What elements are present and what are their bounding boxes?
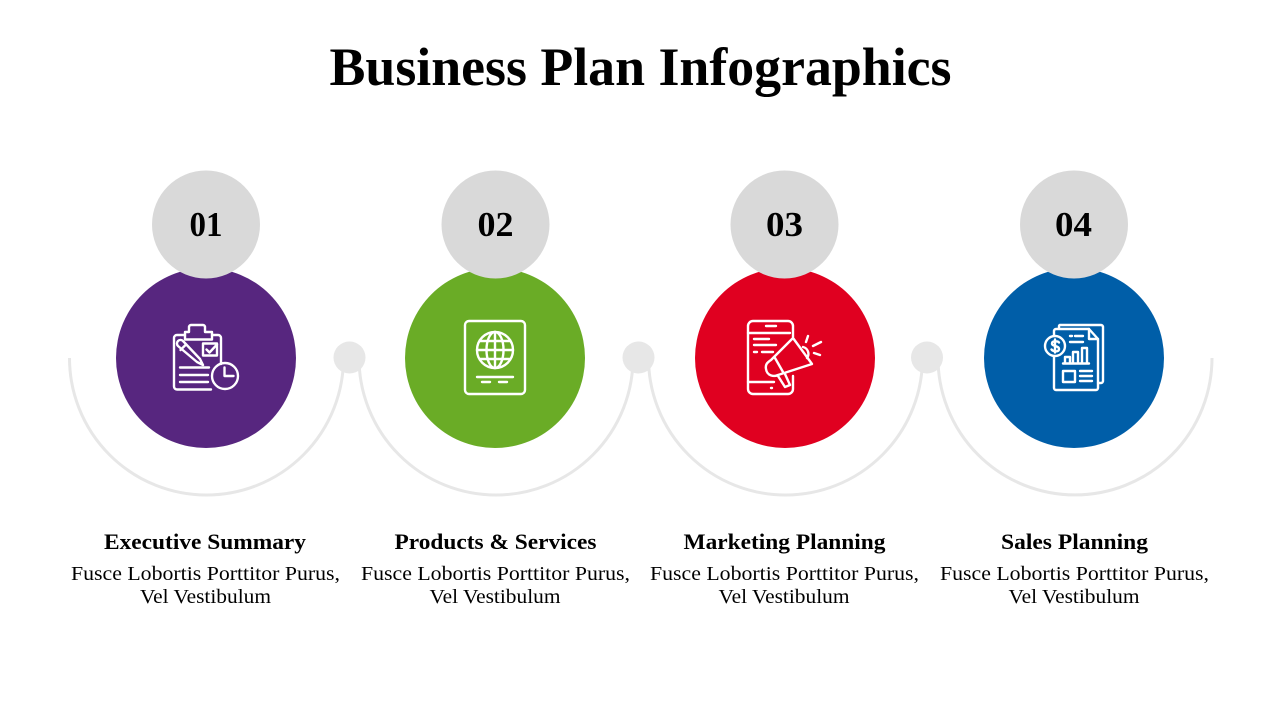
number badge 04: 04 <box>1055 205 1092 244</box>
number badge 01: 01 <box>190 205 222 244</box>
description: Fusce Lobortis Porttitor Purus, <box>650 563 919 585</box>
icon: passport with globe <box>465 321 525 394</box>
connector dot 2 <box>622 342 654 374</box>
step 3: marketing planning <box>650 170 919 608</box>
number badge 01 <box>152 170 260 278</box>
number badge 02: 02 <box>478 205 514 244</box>
icon: phone with megaphone <box>748 321 821 394</box>
number badge 02 <box>442 170 550 278</box>
description: Fusce Lobortis Porttitor Purus, <box>71 563 340 585</box>
heading: Products & Services <box>394 529 597 554</box>
description <box>71 563 340 608</box>
purple circle <box>116 268 296 448</box>
description <box>650 563 919 608</box>
connector dot 1 <box>334 342 366 374</box>
arc connector 1 <box>70 358 344 495</box>
connector dot 3 <box>911 342 943 374</box>
description: Vel Vestibulum <box>1008 586 1140 608</box>
description: Vel Vestibulum <box>430 586 561 608</box>
blue circle <box>984 268 1164 448</box>
red circle <box>695 268 875 448</box>
description <box>940 563 1209 608</box>
description: Vel Vestibulum <box>718 586 850 608</box>
number badge 03: 03 <box>766 205 803 244</box>
arc connector 3 <box>648 358 922 495</box>
step 2: products and services <box>361 170 630 608</box>
description: Fusce Lobortis Porttitor Purus, <box>940 563 1209 585</box>
description: Vel Vestibulum <box>140 586 271 608</box>
heading: Sales Planning <box>1001 529 1148 554</box>
description: Fusce Lobortis Porttitor Purus, <box>361 563 630 585</box>
description <box>361 563 630 608</box>
number badge 03 <box>730 170 838 278</box>
icon: financial report <box>1045 325 1103 390</box>
heading: Executive Summary <box>104 529 306 554</box>
step 4: sales planning <box>940 170 1209 608</box>
green circle <box>405 268 585 448</box>
heading: Marketing Planning <box>684 529 886 554</box>
title: Business Plan Infographics <box>330 37 952 97</box>
arc connector 2 <box>359 358 633 495</box>
icon: clipboard with clock <box>174 325 238 390</box>
step 1: executive summary <box>71 170 340 608</box>
number badge 04 <box>1020 170 1128 278</box>
arc connector 4 <box>938 358 1212 495</box>
